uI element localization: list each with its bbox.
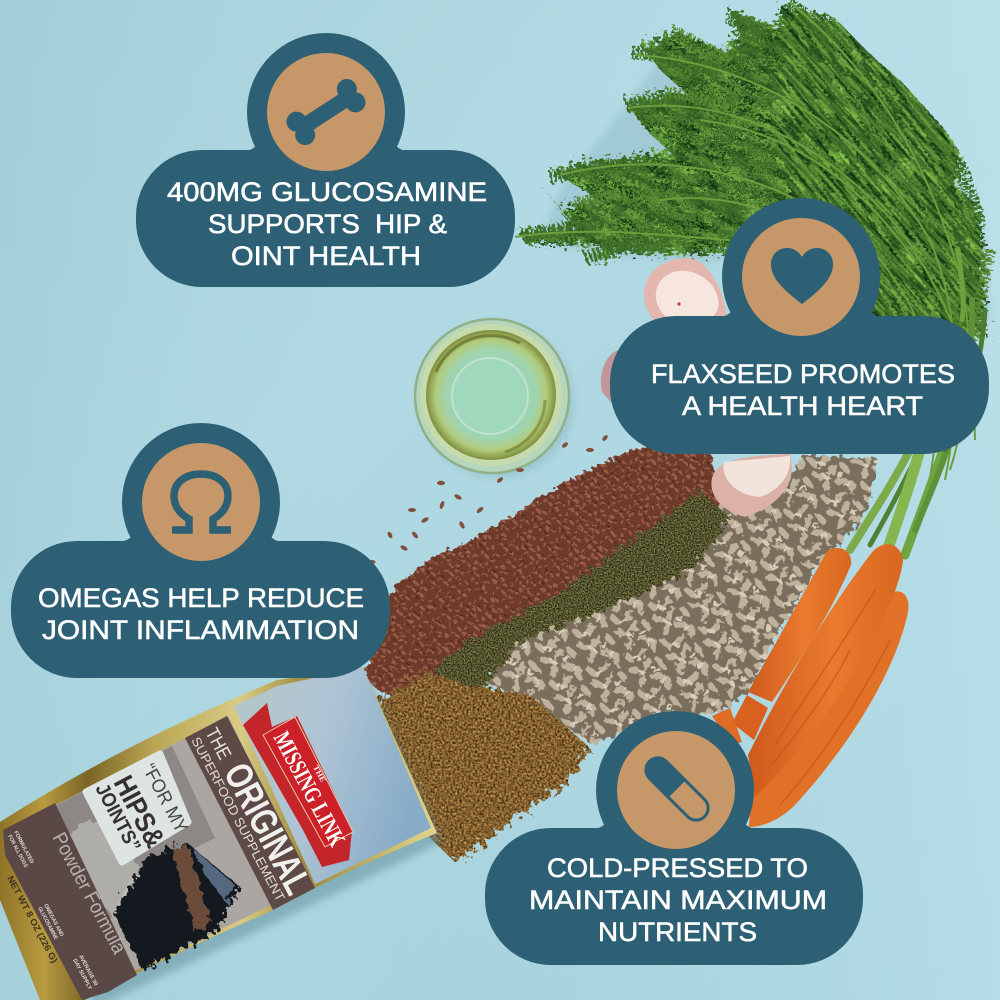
bag text: OMEGAS AND xyxy=(42,903,64,938)
bag text: FORMULATED xyxy=(12,830,34,865)
carrot stems xyxy=(850,250,985,555)
bag text: HIPS& xyxy=(108,770,171,853)
callout: glucosamine: SUPPORTS HIP & xyxy=(208,209,447,239)
product bag xyxy=(0,667,442,1000)
grey photo section xyxy=(42,716,312,975)
bag text: SUPERFOOD SUPPLEMENT xyxy=(188,734,288,904)
scattered flax seeds xyxy=(368,434,609,564)
carrots xyxy=(712,544,908,827)
label for hips and joints xyxy=(86,754,188,862)
bag text: FOR ALL DOGS xyxy=(6,834,29,869)
bag text: JOINTS” xyxy=(91,780,145,856)
grain piles xyxy=(365,434,878,862)
bag text xyxy=(5,724,350,991)
silver top section xyxy=(234,667,431,884)
lower carrot xyxy=(749,591,908,827)
icon: capsule xyxy=(641,753,713,825)
leaf mass left xyxy=(517,5,798,266)
carrot greens xyxy=(514,0,996,560)
frond stems xyxy=(515,2,975,500)
sunflower seed pile xyxy=(486,455,878,745)
callout: cold-pressed xyxy=(485,711,863,965)
callout: glucosamine: OINT HEALTH xyxy=(231,241,421,271)
brown title band xyxy=(185,716,315,910)
bag body gold edge xyxy=(0,667,437,1000)
callout: glucosamine: 400MG GLUCOSAMINE xyxy=(167,177,487,207)
bag text: Powder Formula xyxy=(48,829,130,958)
ground powder pile xyxy=(378,672,590,862)
callout: flaxseed: FLAXSEED PROMOTES xyxy=(651,359,955,389)
callout: glucosamine xyxy=(136,33,515,287)
icon: omega xyxy=(172,474,231,530)
oil bowl xyxy=(414,318,574,478)
callout: cold-pressed: NUTRIENTS xyxy=(598,917,757,947)
callout: omegas: JOINT INFLAMMATION xyxy=(42,615,359,645)
icon: bone xyxy=(283,75,369,149)
flax seed pile xyxy=(365,440,722,698)
bag text: “FOR MY xyxy=(138,760,191,837)
marrow bone centre xyxy=(711,454,792,517)
bag text: MISSING LINK xyxy=(268,728,350,851)
feathery frond tips xyxy=(522,3,990,340)
callout: flaxseed xyxy=(610,198,989,454)
main carrot xyxy=(748,544,903,797)
callout: flaxseed: A HEALTH HEART xyxy=(682,391,923,421)
callout: cold-pressed: COLD-PRESSED TO xyxy=(547,853,808,883)
bag text: GLUCOSAMINE xyxy=(36,906,59,941)
bones xyxy=(601,258,727,408)
bag text: DAY SUPPLY xyxy=(71,958,93,991)
red ribbon xyxy=(243,703,352,867)
brown side band xyxy=(3,803,137,1000)
bag text: NET WT 8 OZ (226 G) xyxy=(5,874,60,965)
bag text: AVERAGE 30 xyxy=(77,954,98,987)
callout: omegas xyxy=(11,423,390,678)
callout: cold-pressed: MAINTAIN MAXIMUM xyxy=(529,885,827,915)
bag text: THE xyxy=(201,724,235,763)
ground flax strip xyxy=(420,490,730,700)
bag text: THE xyxy=(311,764,328,784)
bag text: ORIGINAL xyxy=(215,757,319,902)
leaf mass right xyxy=(764,2,994,342)
callout: omegas: OMEGAS HELP REDUCE xyxy=(38,583,364,613)
icon: heart xyxy=(771,248,833,304)
dog photo xyxy=(113,843,240,970)
